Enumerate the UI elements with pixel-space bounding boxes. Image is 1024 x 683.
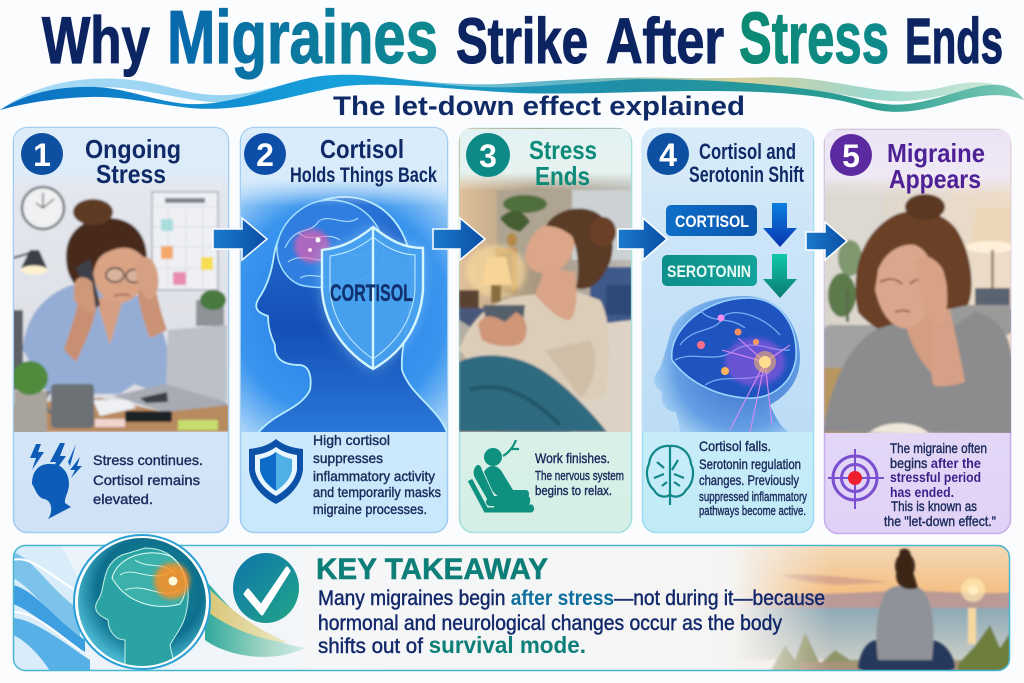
number badge 4: 4 [659,137,677,173]
text: step 3: begins to relax. [535,483,612,498]
panel: step 5 migraine appears [823,129,1014,534]
arrow: cortisol down [763,203,797,247]
title: Strike [456,5,588,77]
key takeaway text [318,587,825,658]
icon: brain outline [647,446,693,505]
number badge 2 [244,133,286,175]
arrow: step 3 to 4 [618,218,667,260]
illustration: head with cortisol shield [241,181,447,432]
heading 1: Ongoing [85,134,181,164]
text: step 4: changes. Previously [699,472,799,488]
arrow: step 1 to 2 [213,218,267,260]
text: step 1: Stress continues. [93,452,203,468]
heading 5 [887,138,985,194]
text: step 5: has ended. [890,484,954,500]
text: step 5: the "let-down effect." [884,513,996,529]
photo: woman with migraine [823,129,1014,434]
number badge 1 [21,133,63,175]
text: step 4: suppressed inflammatory [699,489,807,504]
icon: target [828,449,884,509]
text: step 4: pathways become active. [699,503,806,518]
icon: person reclining [470,440,532,510]
banner frame [14,546,1010,670]
heading 3 [529,135,597,191]
panel: step 3 stress ends [459,128,632,532]
text: step 2 [313,432,441,517]
text: step 3: Work finishes. [535,450,610,466]
title [42,0,1003,79]
key takeaway text: Many migraines begin after stress—not during it—because [318,587,825,610]
key takeaway heading: KEY TAKEAWAY [316,553,548,586]
text: step 3: The nervous system [535,468,624,483]
number badge 3: 3 [479,138,497,174]
text: step 3 [535,450,624,498]
heading 3: Stress [529,135,597,165]
sunset scene with seated woman [742,546,1010,671]
panel: step 4 cortisol and serotonin shift [642,128,814,532]
number badge 1: 1 [33,137,51,173]
illustration: falling hormones and brain [642,128,814,433]
heading 5: Migraine [887,138,985,168]
subtitle: The let-down effect explained [333,91,745,121]
icon: shield [249,439,303,504]
text: step 2: and temporarily masks [313,484,441,500]
text: step 4 [699,438,807,518]
title: Stress [739,0,889,79]
arrow: step 4 to 5 [806,222,847,260]
text: step 2: suppresses [313,450,383,466]
heading 3: Ends [535,161,590,191]
label: cortisol falling [666,205,757,236]
left wave decoration [13,545,90,671]
text: step 2: inflammatory activity [313,468,435,484]
title: Why [42,3,150,77]
number badge 3 [466,133,510,177]
panel: step 2 cortisol [235,128,453,532]
text: step 1: elevated. [93,491,153,507]
label: serotonin falling: SEROTONIN [667,262,751,281]
heading 4 [689,139,804,187]
heading 2 [290,134,437,187]
icon: check mark [233,553,299,623]
arrow: serotonin down [763,254,797,298]
text: step 2: High cortisol [313,432,390,448]
icon: head with lightning [30,443,82,519]
decorative wave ribbon [0,75,1024,112]
title: After [606,5,724,77]
text: step 5: stressful period [890,469,981,485]
photo: stressed woman at desk [12,127,230,435]
text: step 4: Serotonin regulation [699,456,801,472]
heading 5: Appears [889,164,981,194]
heading 1 [85,134,181,189]
heading 2: Cortisol [320,134,404,164]
number badge 5: 5 [842,138,860,174]
key takeaway text: shifts out of survival mode. [318,632,586,658]
heading 4: Serotonin Shift [689,162,804,187]
panel: key takeaway banner [13,535,1015,672]
number badge 5 [830,134,872,176]
text: step 5: begins after the [890,455,981,471]
photo: relaxed woman with mug [459,128,632,433]
key takeaway text: hormonal and neurological changes occur as the body [318,612,782,635]
arrow: step 2 to 3 [433,218,485,260]
text: step 4: Cortisol falls. [699,438,771,454]
heading 4: Cortisol and [699,139,796,164]
text: step 5: This is known as [891,498,977,514]
text: step 2: migraine processes. [313,501,427,517]
text: step 5: The migraine often [890,440,987,456]
teal and gold ribbons [205,580,305,657]
text: step 1 [93,452,203,507]
number badge 2: 2 [256,137,274,173]
text: step 1: Cortisol remains [93,472,200,488]
number badge 4 [647,133,689,175]
heading 1: Stress [96,159,166,189]
panel: step 1 ongoing stress [12,127,230,532]
label: serotonin falling [662,255,757,286]
heading 2: Holds Things Back [290,164,437,187]
head and brain medallion [74,535,210,670]
text: step 5 [884,440,996,529]
illustration: head with cortisol shield: CORTISOL [330,280,413,307]
label: cortisol falling: CORTISOL [675,212,749,231]
